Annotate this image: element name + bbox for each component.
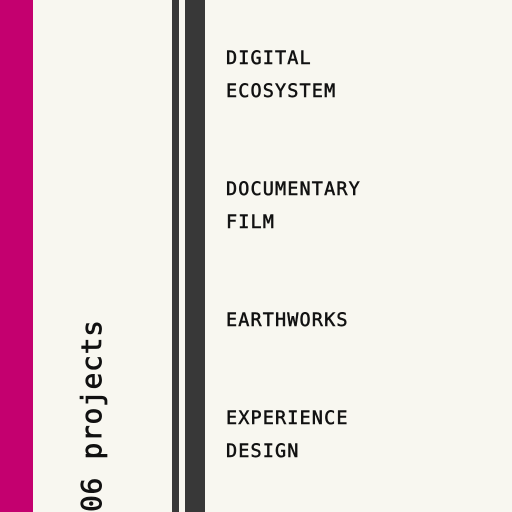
magenta side band — [0, 0, 33, 512]
list item: digital ecosystem — [226, 48, 336, 102]
rotated label: project count: 06 projects — [75, 319, 108, 512]
list item: experience design: EXPERIENCE — [226, 408, 349, 429]
list item: experience design — [226, 408, 349, 462]
list item: documentary film: FILM — [226, 212, 275, 233]
list item: digital ecosystem: DIGITAL — [226, 48, 312, 69]
thick vertical bar — [185, 0, 205, 512]
list item: digital ecosystem: ECOSYSTEM — [226, 81, 336, 102]
list item: experience design: DESIGN — [226, 441, 300, 462]
thin vertical bar — [172, 0, 179, 512]
list item: earthworks: EARTHWORKS — [226, 310, 349, 331]
list item: documentary film — [226, 179, 361, 233]
list item: documentary film: DOCUMENTARY — [226, 179, 361, 200]
